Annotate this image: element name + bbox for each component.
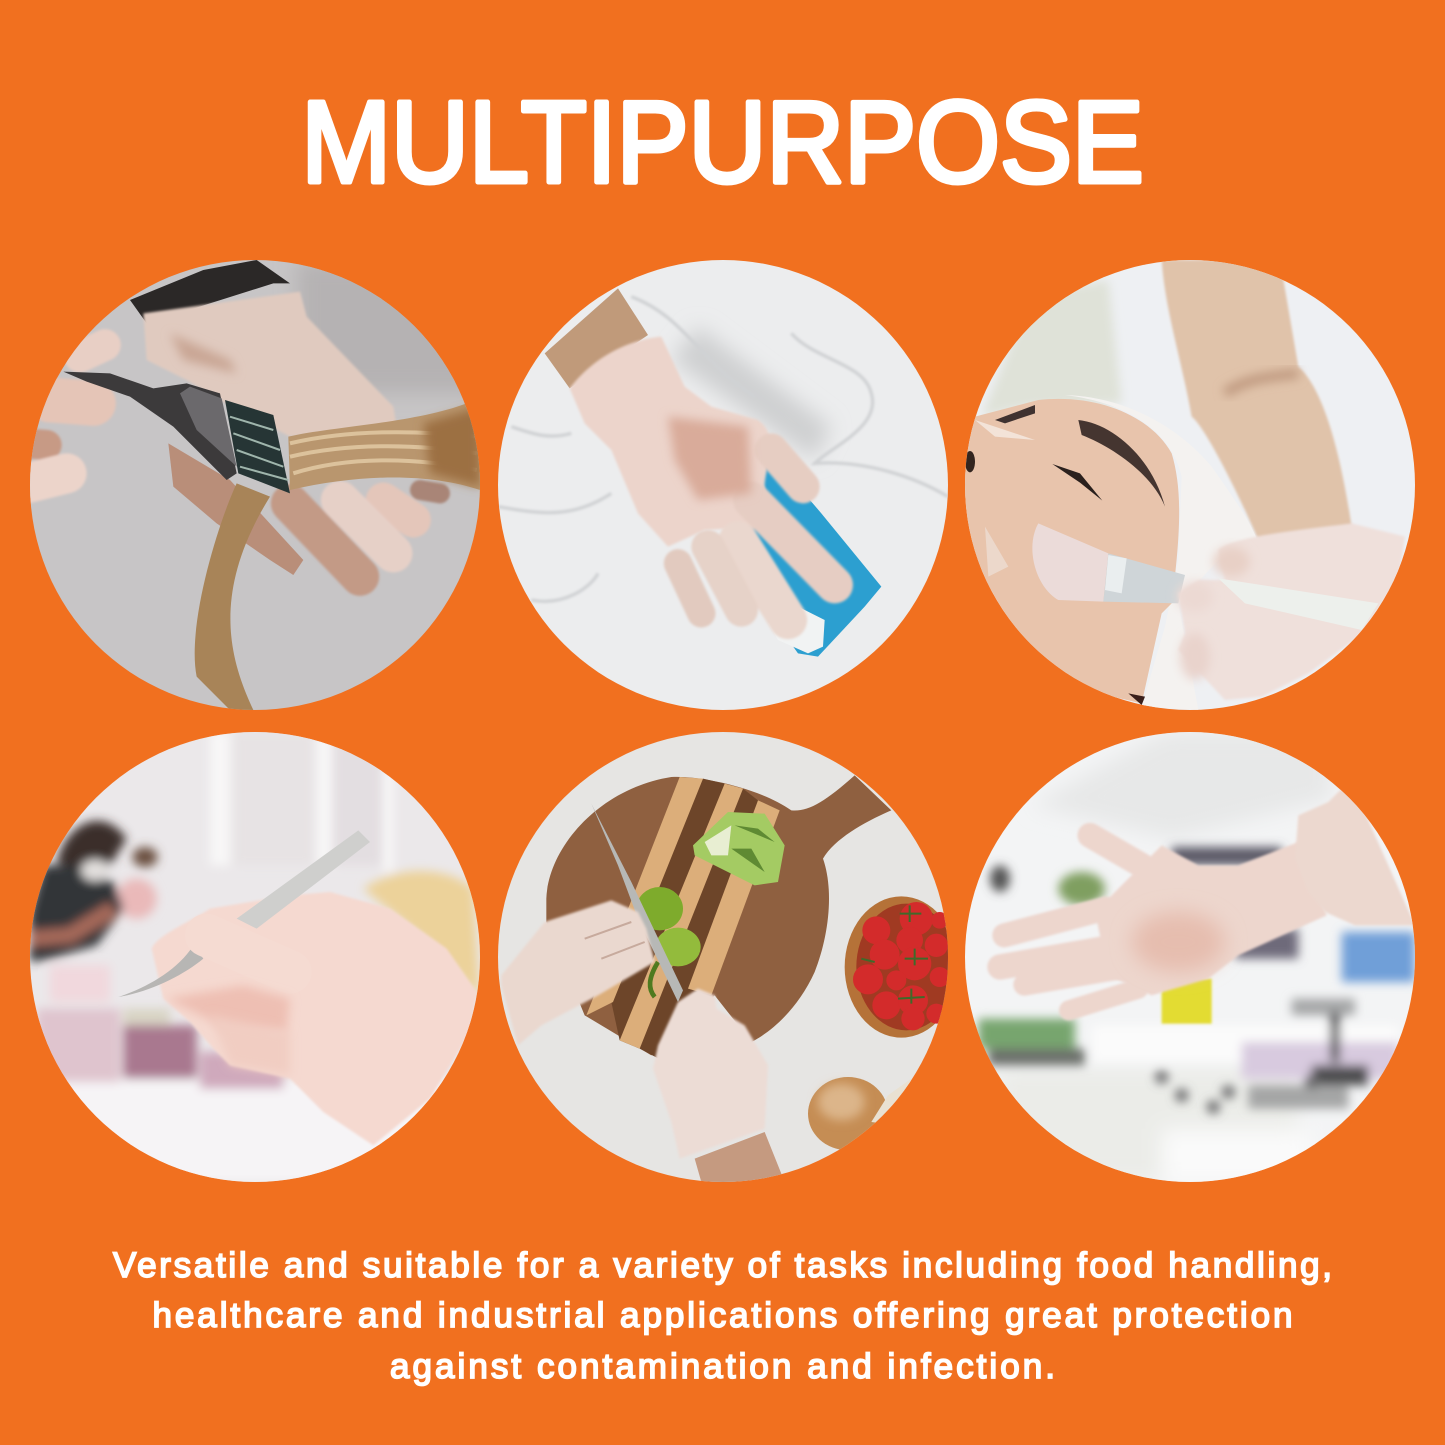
knife [591, 804, 683, 1002]
gloved hands [1095, 842, 1327, 995]
arm and right hand [695, 1132, 785, 1182]
description text: against contamination and infection. [390, 1347, 1055, 1386]
photo: gloved hand in a clinic [965, 732, 1415, 1182]
photo: facial mask treatment [965, 260, 1415, 710]
peppers [693, 812, 785, 885]
description text: healthcare and industrial applications offering great protection [152, 1296, 1292, 1335]
photo: hair dyeing with gloved hands [27, 260, 480, 710]
onion [808, 1077, 888, 1150]
photo: tweezers in a beauty salon [30, 732, 480, 1182]
photo: cleaning marble with a sponge [498, 260, 948, 710]
title: MULTIPURPOSE [301, 77, 1144, 207]
left hand [501, 900, 655, 1045]
photo: cutting vegetables on a board [498, 732, 958, 1182]
cutting board [546, 775, 891, 1055]
description text: Versatile and suitable for a variety of tasks including food handling, [113, 1246, 1332, 1285]
bowl [845, 896, 958, 1038]
description text [113, 1246, 1332, 1386]
